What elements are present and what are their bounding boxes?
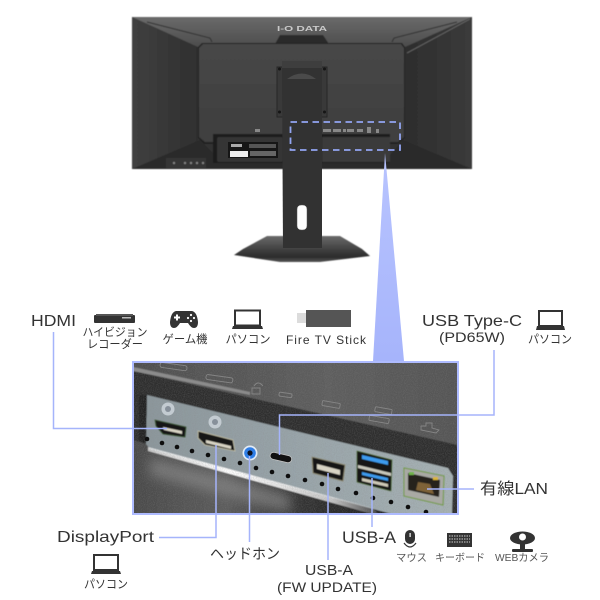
logo: I-O DATA: I-O DATA [277,26,327,33]
icon: webcam [510,532,535,552]
rating label sticker [228,142,278,158]
DisplayPort port [198,431,235,451]
label: high-vision recorder: レコーダー [87,337,143,351]
label: USB-A FW update [277,562,377,595]
label: wired LAN: 有線LAN [480,480,548,498]
icon: laptop PC [232,310,263,329]
leader lines [54,332,494,560]
USB-A port FW update [312,457,345,481]
port close-up photo [132,361,459,515]
stand base [234,236,370,262]
line: USB-A [371,478,373,527]
monitor body [132,17,472,169]
label: PC (USB-C): パソコン [528,333,572,346]
vent holes [145,437,428,514]
label: keyboard: キーボード [435,552,485,564]
HDMI port [155,420,186,437]
VESA bracket [277,67,327,117]
line: LAN [427,488,474,490]
label: high-vision recorder [82,326,148,351]
monitor rear view [132,17,472,262]
top plate [133,361,458,445]
soft reflection [150,458,290,512]
label: USB Type-C (PD65W): (PD65W) [439,329,505,345]
screws [162,402,222,428]
line: DisplayPort [159,445,216,538]
label: mouse: マウス [396,552,427,564]
stand neck [282,61,322,248]
label: PC (DisplayPort): パソコン [84,578,128,591]
label: game console: ゲーム機 [162,333,208,346]
label: DisplayPort: DisplayPort [57,529,155,546]
port area: dashed highlight [290,122,400,150]
label: headphone: ヘッドホン [210,547,280,563]
label: USB-A FW update: (FW UPDATE) [277,579,377,595]
line: headphone [248,456,250,542]
label: USB-A: USB-A [342,528,397,547]
LAN port [404,468,444,505]
icon: laptop PC (DisplayPort) [91,555,121,574]
icon: mouse [404,530,416,547]
icon: Fire TV Stick [297,310,351,327]
label: USB Type-C (PD65W) [422,313,522,345]
lower housing [133,440,400,514]
icon: gamepad [170,311,198,328]
headphone jack [242,446,258,460]
label: USB Type-C (PD65W): USB Type-C [422,313,522,330]
USB-A stacked ports [357,451,392,491]
icon: laptop PC (USB-C) [536,311,565,330]
dark bracket tab [139,395,147,444]
port area printed marks [255,127,379,133]
label: high-vision recorder: ハイビジョン [82,326,148,339]
printed port labels [160,362,439,433]
label: USB-A FW update: USB-A [305,562,353,579]
USB-C port [269,452,292,463]
line: USB Type-C [280,350,494,455]
label: Fire TV Stick: Fire TV Stick [286,333,367,347]
label: web camera: WEBカメラ [495,552,549,564]
icon: keyboard [447,533,472,547]
label: HDMI: HDMI [31,313,76,330]
metal IO strip [146,395,453,514]
zoom beam [373,153,404,361]
line: USB-A FW update [327,473,329,560]
icon: recorder [94,314,135,323]
label: PC: パソコン [226,333,270,346]
photo frame [133,362,458,514]
highlight [148,447,378,514]
line: HDMI [54,332,167,428]
